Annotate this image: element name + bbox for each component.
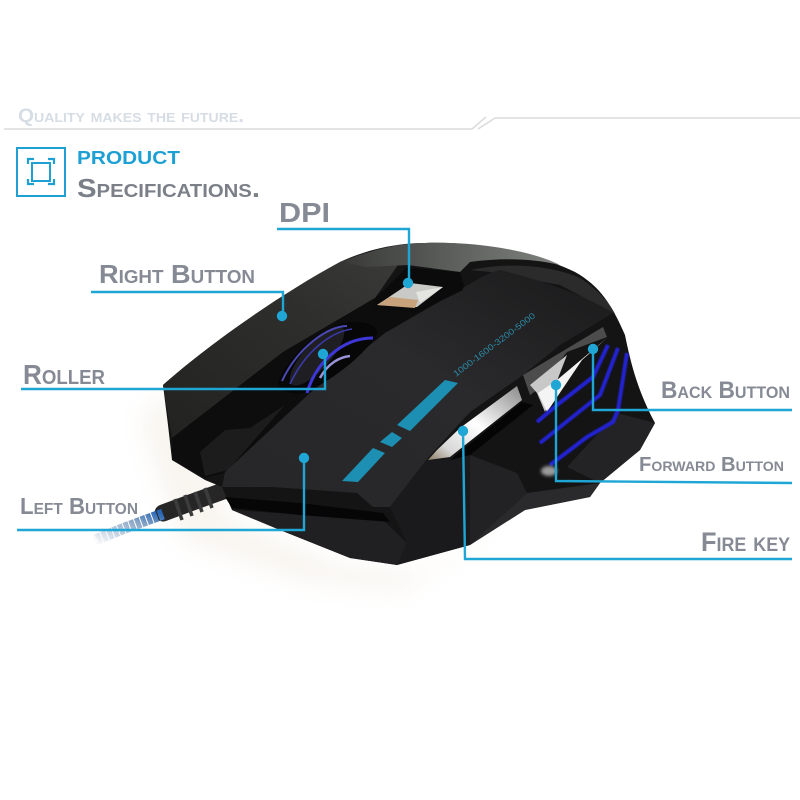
- right button: [163, 245, 412, 438]
- back button: [538, 338, 607, 412]
- fire key: [428, 386, 522, 460]
- wheel: [278, 319, 377, 394]
- callout: Fire key: [458, 426, 792, 559]
- callout: Forward Button: [551, 380, 792, 483]
- callout: Fire key: Fire key: [701, 527, 790, 557]
- header tagline: Quality makes the future.: [18, 106, 244, 127]
- callout: Back Button: [588, 344, 792, 410]
- left button: [222, 270, 613, 507]
- callout: Forward Button: Forward Button: [639, 454, 784, 476]
- callout: Left Button: [17, 453, 309, 530]
- top right cover: [470, 266, 615, 314]
- groove ramp: [200, 405, 285, 476]
- callout: Left Button: Left Button: [20, 493, 138, 519]
- icon: product frame: [17, 148, 65, 196]
- mouse shadow: [140, 390, 530, 592]
- mouse illustration: [95, 243, 655, 565]
- callout: Right Button: Right Button: [99, 259, 255, 289]
- cable: [95, 488, 226, 540]
- callout: DPI: [277, 197, 413, 288]
- top cover highlight: [345, 243, 560, 272]
- callout: Back Button: Back Button: [661, 377, 790, 404]
- mouse body: [163, 243, 655, 565]
- lower side highlight: [541, 466, 557, 476]
- heading: product: product: [77, 142, 180, 170]
- DPI button: [373, 267, 463, 312]
- callout: Roller: [21, 349, 328, 390]
- blue stripes: [342, 380, 458, 482]
- callout: Roller: Roller: [23, 359, 106, 390]
- centre groove: [172, 268, 465, 478]
- DPI scale: 1000-1600-3200-5000: [451, 310, 537, 379]
- callout: Right Button: [91, 259, 287, 321]
- callout: DPI: DPI: [279, 197, 330, 228]
- lower shell facets: [225, 413, 655, 565]
- forward button: [523, 327, 607, 395]
- LED strips: [537, 345, 627, 465]
- heading: specifications: Specifications.: [77, 173, 260, 203]
- header rule: [4, 117, 800, 129]
